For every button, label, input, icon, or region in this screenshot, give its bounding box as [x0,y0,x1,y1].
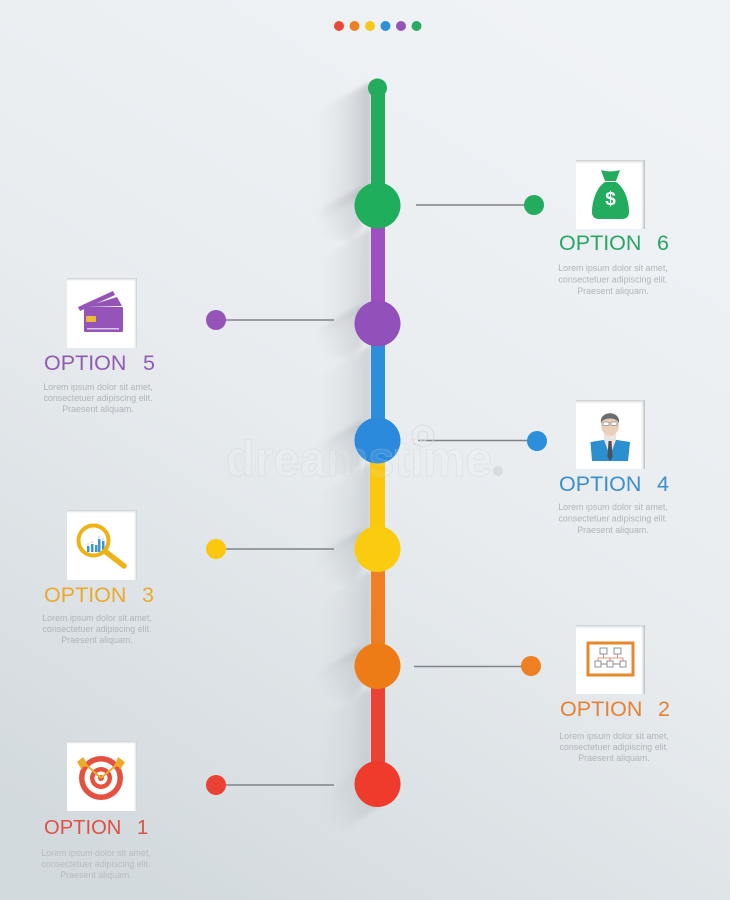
description: Lorem ipsum dolor sit amet, [41,848,151,858]
icon box [67,278,137,348]
icon: target with arrows [77,756,125,800]
icon: credit cards [78,291,123,332]
panel: option 1 [41,741,151,880]
heading: 1 [137,817,148,839]
timeline cast shadows [308,82,382,829]
description: consectetuer adipiscing elit. [43,393,153,403]
heading: 2 [658,697,670,721]
connector end dots [206,195,547,795]
description: Praesent aliquam. [577,286,649,296]
icon box [576,400,645,469]
panel: option 6 [558,160,669,296]
watermark: dreamstime [226,431,492,487]
heading: OPTION [560,697,642,721]
description: consectetuer adipiscing elit. [558,274,668,284]
heading: OPTION [44,583,126,607]
description: Praesent aliquam. [60,870,132,880]
description: Lorem ipsum dolor sit amet, [42,613,152,623]
panel: option 2 [559,625,670,763]
description: Praesent aliquam. [61,635,133,645]
heading: OPTION [44,351,126,375]
heading: 5 [143,351,155,375]
icon box [67,741,137,811]
icon box [576,160,645,229]
icon box [67,510,137,580]
progress dots row [334,21,422,31]
description: consectetuer adipiscing elit. [41,859,151,869]
description: consectetuer adipiscing elit. [559,742,669,752]
icon: flowchart board [588,643,633,675]
description: Lorem ipsum dolor sit amet, [43,382,153,392]
heading: OPTION [559,472,641,496]
description: consectetuer adipiscing elit. [558,514,668,524]
timeline nodes [354,182,400,807]
description: Lorem ipsum dolor sit amet, [559,731,669,741]
description: Lorem ipsum dolor sit amet, [558,263,668,273]
heading: OPTION [559,231,641,255]
timeline spine [368,78,387,768]
connector lines [226,205,528,785]
panel: option 5 [43,278,155,414]
icon box [576,625,645,694]
description: Praesent aliquam. [578,753,650,763]
description: consectetuer adipiscing elit. [42,624,152,634]
description: Lorem ipsum dolor sit amet, [558,502,668,512]
icon: businessman [590,413,630,461]
description: Praesent aliquam. [62,404,134,414]
heading: OPTION [44,817,121,839]
heading: 3 [142,583,154,607]
icon: magnifier with chart [78,526,124,566]
panel: option 4 [558,400,669,535]
description: Praesent aliquam. [577,525,649,535]
icon: money bag: $ [605,189,616,210]
panel: option 3 [42,510,154,645]
heading: 4 [657,472,669,496]
heading: 6 [657,231,669,255]
